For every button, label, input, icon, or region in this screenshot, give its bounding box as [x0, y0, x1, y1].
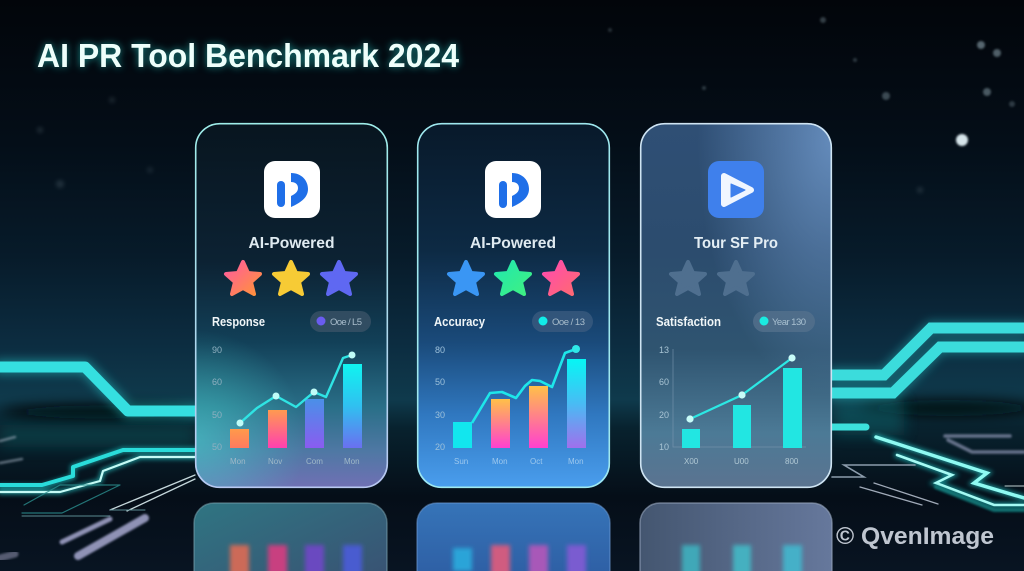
metric label: Accuracy [434, 314, 486, 329]
legend pill [310, 311, 371, 332]
legend pill [753, 311, 815, 332]
panel: card 1 Response [195, 123, 388, 488]
bar chart: Sun [454, 457, 468, 466]
bar chart [212, 345, 362, 466]
tool name: AI-Powered [470, 235, 556, 252]
bar chart: 50 [212, 442, 222, 452]
legend pill [532, 311, 593, 332]
bar chart [435, 345, 586, 466]
bar chart: 800 [785, 457, 799, 466]
star rating [449, 262, 578, 294]
title: AI PR Tool Benchmark 2024 [37, 37, 460, 74]
floor shadow bands [0, 400, 1024, 447]
legend pill: Ooe / L5 [330, 317, 362, 328]
star rating [226, 262, 356, 294]
card reflections [194, 503, 832, 571]
bar chart: 50 [435, 377, 445, 387]
star rating [671, 262, 753, 294]
bar chart: U00 [734, 457, 749, 466]
bar chart: 60 [212, 377, 222, 387]
left circuit traces [0, 367, 196, 558]
bar chart: Mon [492, 457, 508, 466]
bar chart: X00 [684, 457, 699, 466]
panel: card 3 Satisfaction [640, 123, 832, 488]
tool name: Tour SF Pro [694, 235, 778, 252]
tool name: AI-Powered [248, 235, 334, 252]
icon: blue play logo [708, 161, 764, 218]
bar chart: 80 [435, 345, 445, 355]
bar chart: Com [306, 457, 323, 466]
bar chart: 50 [212, 410, 222, 420]
title: AI PR Tool Benchmark 2024 [37, 37, 460, 74]
bar chart: Nov [268, 457, 282, 466]
bar chart: 20 [659, 410, 669, 420]
bar chart [659, 345, 806, 466]
bar chart: Mon [230, 457, 246, 466]
bar chart: Mon [344, 457, 360, 466]
bar chart: 10 [659, 442, 669, 452]
metric label: Satisfaction [656, 314, 721, 329]
metric label: Response [212, 314, 265, 329]
bar chart: Oct [530, 457, 543, 466]
bar chart: Mon [568, 457, 584, 466]
watermark: © QvenImage [836, 523, 994, 550]
bar chart: 20 [435, 442, 445, 452]
icon: blue P logo [485, 161, 541, 218]
right circuit traces [830, 328, 1024, 510]
bar chart: 30 [435, 410, 445, 420]
bar chart: 13 [659, 345, 669, 355]
legend pill: Ooe / 13 [552, 317, 585, 328]
background particles [37, 17, 1015, 193]
panel: card 2 Accuracy [417, 123, 610, 488]
bar chart: 90 [212, 345, 222, 355]
legend pill: Year 130 [772, 317, 806, 328]
icon: blue P logo [264, 161, 320, 218]
bar chart: 60 [659, 377, 669, 387]
